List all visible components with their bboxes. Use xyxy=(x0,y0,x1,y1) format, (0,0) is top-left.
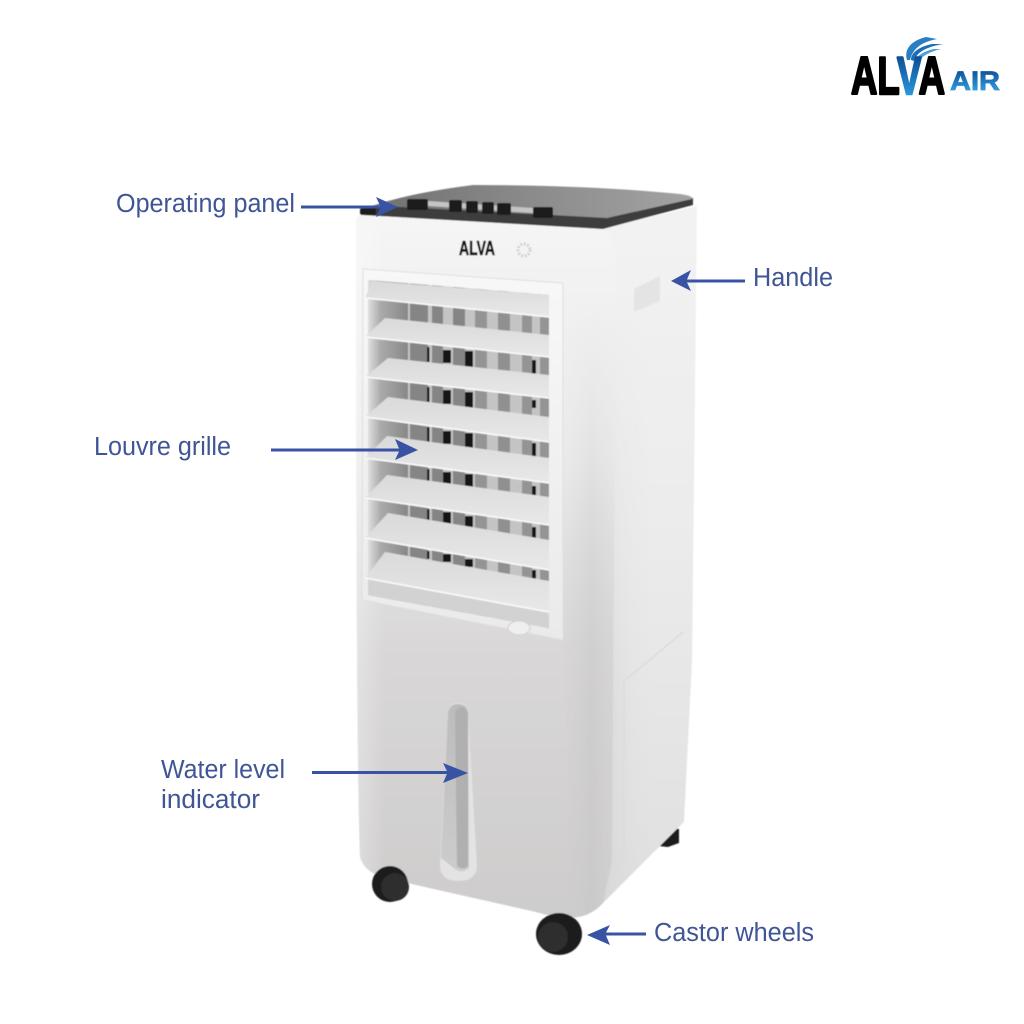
label: Handle: Handle xyxy=(753,264,833,292)
front badge ALVA: ALVA xyxy=(459,238,495,260)
bottom compartment xyxy=(368,578,549,630)
slat front edges xyxy=(365,298,549,612)
label: Louvre grille: Louvre grille xyxy=(94,433,231,461)
arrow: water level xyxy=(312,763,468,783)
water level window xyxy=(440,703,477,881)
air cooler product photo xyxy=(356,185,697,955)
louvre grille frame xyxy=(362,269,563,640)
label: Castor wheels xyxy=(587,919,814,947)
label: Operating panel: Operating panel xyxy=(116,190,295,218)
label: Water level indicator: indicator xyxy=(161,786,261,814)
cooler side panel xyxy=(570,206,697,918)
rounded corner shading xyxy=(583,446,606,900)
logo: Alva Air xyxy=(851,37,1000,106)
label: Handle xyxy=(671,264,833,292)
knobs xyxy=(360,199,553,218)
louvre grille interior xyxy=(368,280,549,630)
side panel moulded recess xyxy=(622,632,683,860)
top cover rim xyxy=(362,198,693,229)
wheel: rear right castor xyxy=(658,828,679,847)
wheel: front left castor xyxy=(372,866,409,902)
label: Water level indicator: Water level xyxy=(161,756,285,784)
speaker dots xyxy=(518,244,530,256)
text: AIR wordmark: AIR xyxy=(950,66,1000,96)
grille knob xyxy=(508,621,530,635)
label: Louvre grille xyxy=(94,433,418,461)
left edge highlight xyxy=(356,222,385,878)
handle recess xyxy=(634,270,672,312)
slats xyxy=(365,281,549,612)
top cover surface xyxy=(372,185,692,218)
label: Water level indicator xyxy=(161,756,468,814)
label: Operating panel xyxy=(116,190,398,218)
arrow: handle xyxy=(671,270,745,291)
arrow: castor wheels xyxy=(587,925,646,945)
text: ALVA wordmark: ALVA xyxy=(851,47,945,106)
arrow: operating panel xyxy=(301,197,398,217)
operating strip xyxy=(428,201,533,213)
cooler front panel xyxy=(356,214,616,918)
icon: logo wing swoosh xyxy=(906,37,943,62)
dark fan accents xyxy=(427,347,536,579)
label: Castor wheels: Castor wheels xyxy=(654,919,814,947)
arrow: louvre grille xyxy=(271,439,418,460)
wheel: front right castor xyxy=(536,913,582,955)
